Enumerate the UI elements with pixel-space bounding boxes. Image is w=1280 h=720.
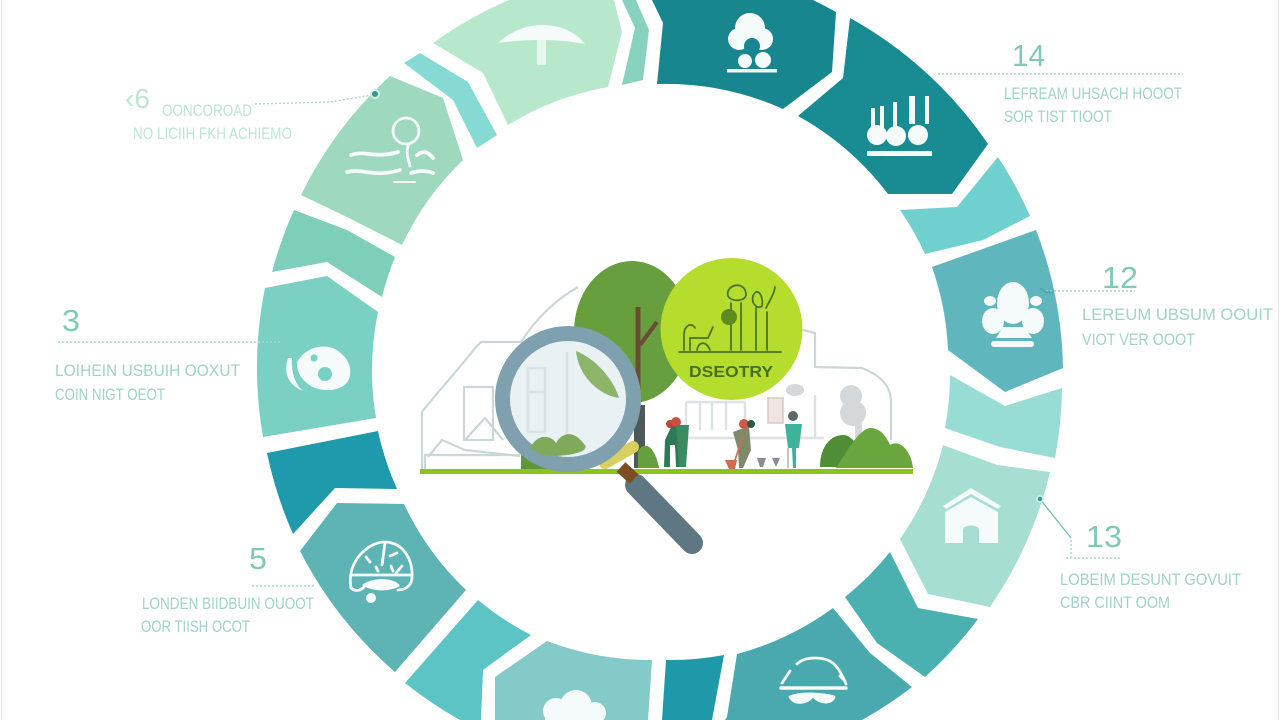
lime badge [660, 258, 802, 400]
callout 3: LOIHEIN USBUIH OOXUT [55, 361, 240, 380]
icon: people group [982, 282, 1044, 347]
segment: top dark teal [652, 0, 836, 109]
person center [725, 419, 780, 469]
callout 14 [938, 38, 1183, 126]
segment: top pale green [433, 0, 622, 125]
icon: water and balloon [347, 118, 433, 182]
icon: dome gauge [350, 542, 412, 603]
callout 3: 3 [62, 303, 80, 338]
segment: lower right teal [845, 552, 978, 677]
ground line [420, 469, 913, 474]
center illustration [420, 258, 913, 543]
segment: upper left narrow aqua [404, 53, 497, 148]
segment: number 6 [301, 76, 463, 245]
callout 12: 12 [1102, 260, 1138, 295]
segment: right pale teal [945, 375, 1062, 458]
segment: number 12 [932, 230, 1063, 392]
segment: lower right car [725, 608, 912, 720]
callout 3: COIN NIGT OEOT [55, 385, 165, 404]
segment: number 14 [798, 18, 988, 194]
callout 13: 13 [1086, 519, 1122, 554]
segment: number 13 [900, 445, 1050, 607]
framed picture [768, 398, 783, 423]
badge label: DSEOTRY [689, 364, 773, 381]
callout 13: LOBEIM DESUNT GOVUIT [1060, 570, 1241, 589]
tree [574, 261, 690, 468]
callout 5: LONDEN BIIDBUIN OUOOT [142, 594, 314, 613]
left bushes [521, 446, 659, 470]
callout 6: NO LICIIH FKH ACHIEMO [133, 124, 292, 143]
icon: cloud [543, 690, 606, 720]
segment: upper right light teal [900, 157, 1030, 254]
segment: top narrow mint [622, 0, 649, 85]
segment: upper left mint [272, 210, 395, 297]
segment: bottom cloud [495, 641, 652, 720]
callout 13: CBR CIINT OOM [1060, 593, 1170, 612]
callout 12 [1040, 260, 1273, 349]
callout 5: 5 [249, 541, 267, 576]
callout 14: LEFREAM UHSACH HOOOT [1004, 84, 1182, 103]
right bushes [820, 428, 913, 468]
icon: umbrella [498, 25, 585, 65]
callout 6 [125, 83, 379, 143]
callout 5: OOR TIISH OCOT [141, 617, 250, 636]
callout 13 [1037, 496, 1241, 612]
person group left [664, 417, 689, 467]
callout 6: ‹6 [125, 83, 150, 114]
landscape outline [422, 287, 891, 470]
callout 6: OONCOROAD [162, 101, 252, 120]
icon: shell [286, 347, 350, 391]
grey tree [786, 384, 866, 438]
segmented ring [257, 0, 1063, 720]
icon: house [943, 488, 1001, 543]
callout 5 [141, 541, 315, 636]
segment: lower left bright teal [405, 600, 531, 720]
segment: number 3 [257, 276, 378, 437]
callout 14: SOR TIST TIOOT [1004, 107, 1112, 126]
segment: number 5 [300, 503, 466, 672]
callout 12: LEREUM UBSUM OOUIT [1082, 305, 1273, 324]
callout 3 [55, 303, 280, 404]
callout 14: 14 [1012, 38, 1045, 73]
segment: bottom dark teal [662, 655, 724, 720]
magnifying glass [502, 334, 692, 543]
icon: three plants [867, 96, 932, 156]
people [664, 411, 802, 469]
icon: tree cluster [727, 13, 777, 72]
callout 12: VIOT VER OOOT [1082, 330, 1195, 349]
icon: car [781, 658, 846, 703]
segment: left dark teal [267, 431, 397, 534]
person right [785, 411, 802, 468]
